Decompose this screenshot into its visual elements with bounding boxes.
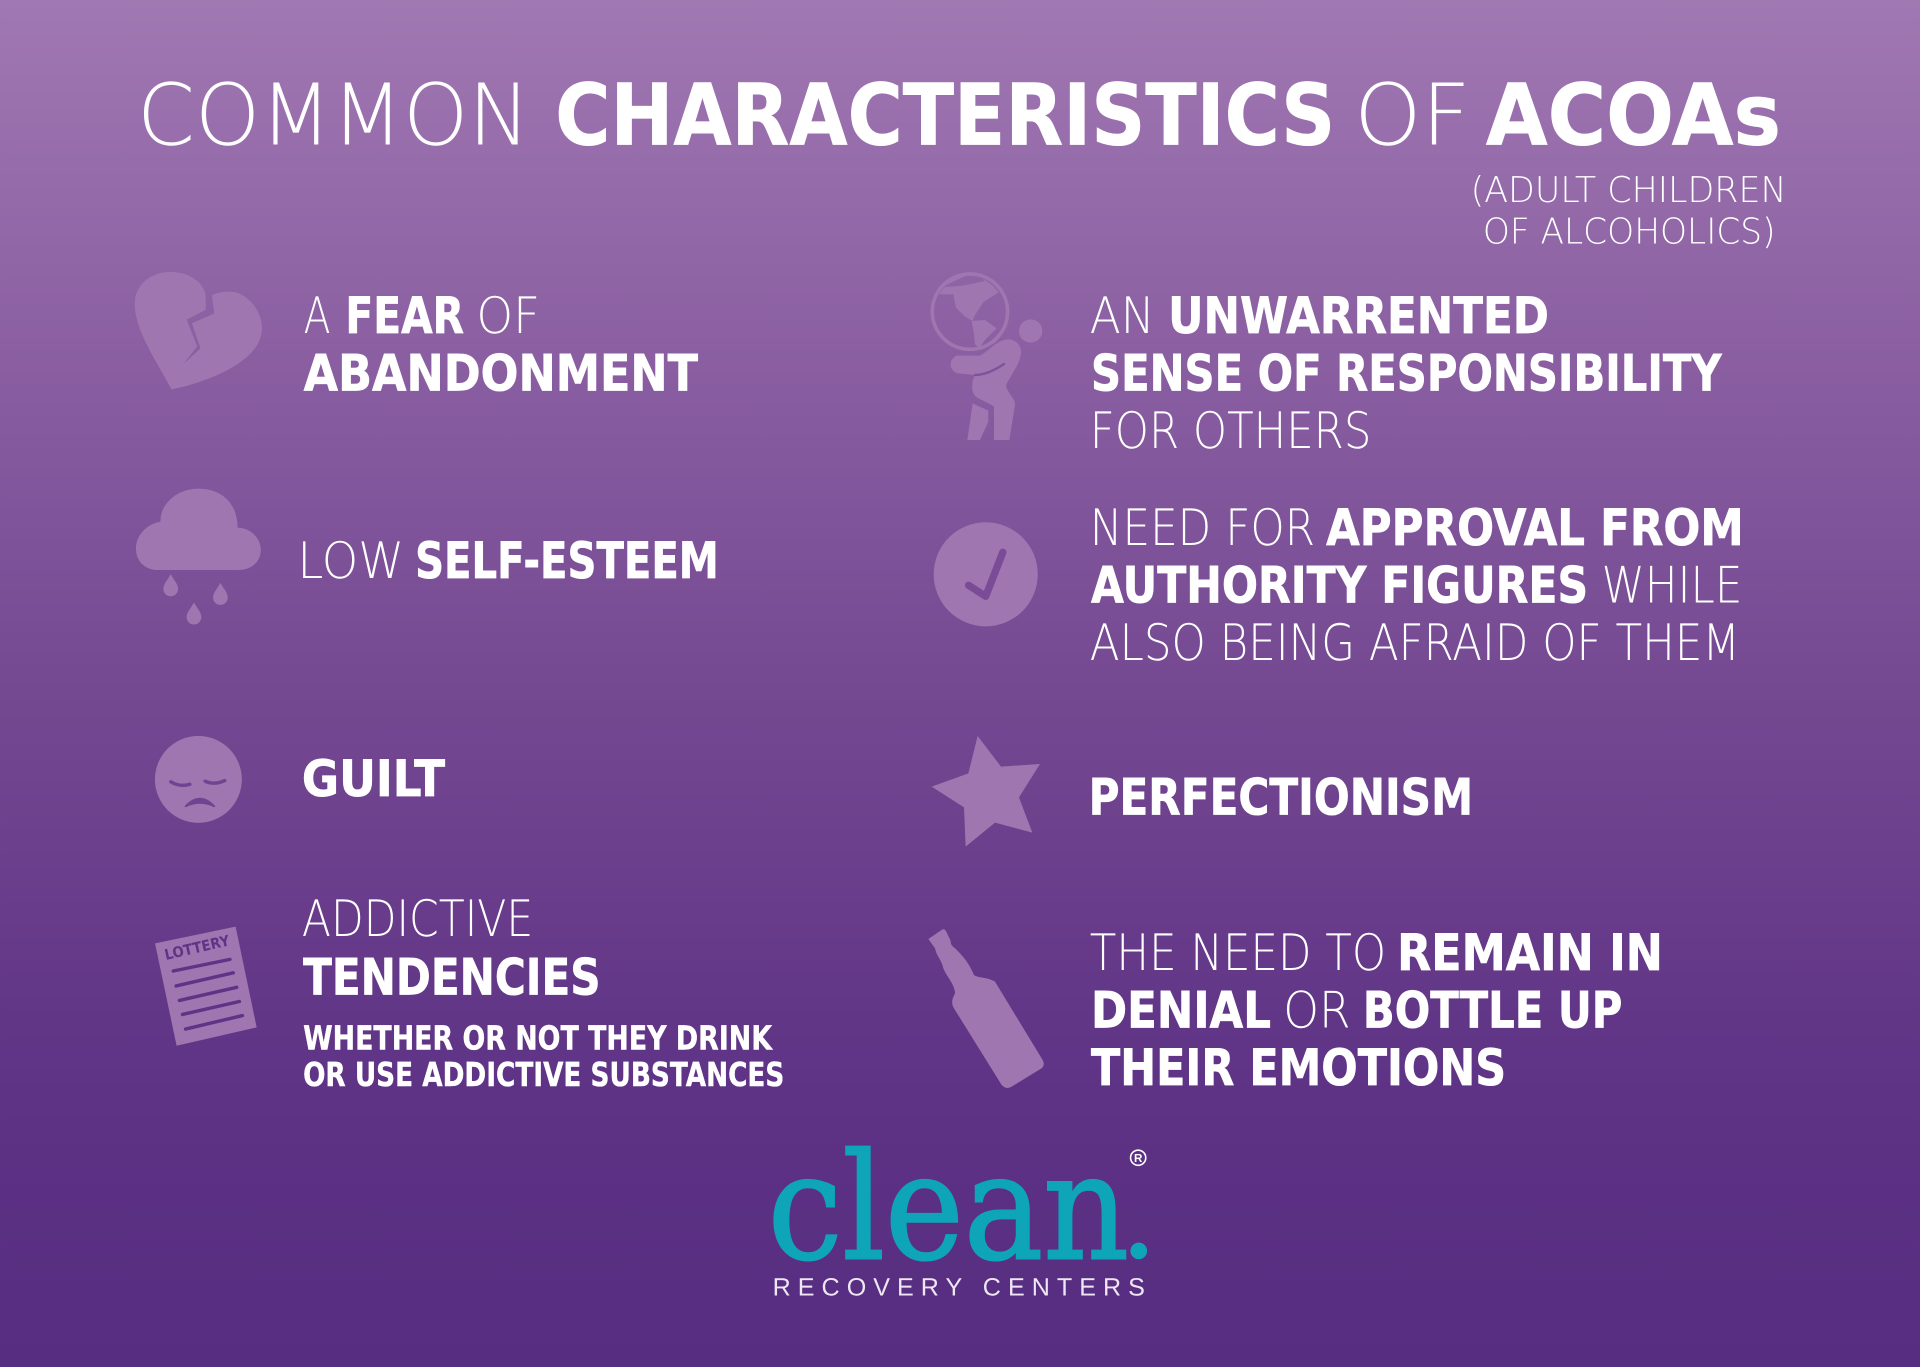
text: need for approval: WHILE (1602, 556, 1742, 615)
logo: clean recovery centers: clean (768, 1124, 1129, 1294)
icon: star (932, 736, 1040, 847)
icon: lottery ticket: LOTTERY (163, 932, 232, 964)
text: remain in denial: OR (1283, 981, 1351, 1040)
icon: check mark circle (934, 522, 1038, 626)
text: fear of abandonment (304, 287, 698, 403)
text: sense of responsibility (1090, 287, 1723, 460)
text: remain in denial: BOTTLE UP (1363, 981, 1622, 1040)
icon: lottery ticket (155, 927, 257, 1046)
title: OF (1354, 67, 1471, 165)
text: low self-esteem (298, 531, 719, 590)
icon: bottle (928, 929, 1044, 1088)
text: fear of abandonment: FEAR (345, 287, 464, 345)
text: remain in denial: THEIR EMOTIONS (1091, 1038, 1506, 1097)
text: remain in denial (1090, 923, 1663, 1097)
logo: clean recovery centers: RECOVERY CENTERS (773, 1273, 1145, 1302)
text: low self-esteem: SELF-ESTEEM (415, 531, 719, 590)
text: fear of abandonment: OF (476, 287, 540, 345)
text: fear of abandonment: ABANDONMENT (304, 344, 698, 403)
text: remain in denial: DENIAL (1091, 981, 1271, 1040)
text: sense of responsibility: AN (1090, 287, 1155, 345)
text: remain in denial: THE NEED TO (1090, 923, 1386, 982)
title: ACOAs (1486, 67, 1781, 165)
title: COMMON (137, 67, 530, 165)
text: sense of responsibility: FOR OTHERS (1090, 402, 1371, 460)
text: need for approval: AUTHORITY FIGURES (1091, 556, 1588, 615)
text: fear of abandonment: A (304, 287, 331, 345)
logo: clean recovery centers: R (1134, 1152, 1143, 1166)
title (137, 67, 1781, 165)
text: addictive tendencies: ADDICTIVE (302, 890, 533, 948)
icon: rain cloud (136, 489, 261, 624)
subtitle: OF ALCOHOLICS) (1483, 211, 1775, 252)
title: CHARACTERISTICS (555, 67, 1335, 165)
text: addictive tendencies (302, 890, 784, 1095)
text: need for approval (1090, 498, 1744, 672)
text: addictive tendencies: OR USE ADDICTIVE SUBSTANCES (303, 1057, 784, 1095)
text: addictive tendencies: WHETHER OR NOT THEY DRINK (303, 1020, 773, 1058)
text: need for approval: NEED FOR (1090, 498, 1315, 557)
icon: sad face (155, 736, 242, 823)
text: remain in denial: REMAIN IN (1397, 923, 1663, 982)
icon: person carrying globe (932, 274, 1042, 440)
text: sense of responsibility: SENSE OF RESPONSIBILITY (1091, 344, 1723, 403)
text: low self-esteem: LOW (298, 531, 404, 590)
text: sense of responsibility: UNWARRENTED (1168, 287, 1549, 345)
text: need for approval: ALSO BEING AFRAID OF THEM (1090, 613, 1740, 672)
text: addictive tendencies: TENDENCIES (303, 948, 601, 1007)
subtitle: (ADULT CHILDREN (1471, 169, 1787, 211)
text: need for approval: APPROVAL FROM (1326, 498, 1744, 557)
text: guilt: GUILT (302, 749, 445, 808)
icon: broken heart (135, 272, 262, 389)
text: perfectionism: PERFECTIONISM (1089, 768, 1473, 827)
subtitle (1471, 169, 1787, 252)
